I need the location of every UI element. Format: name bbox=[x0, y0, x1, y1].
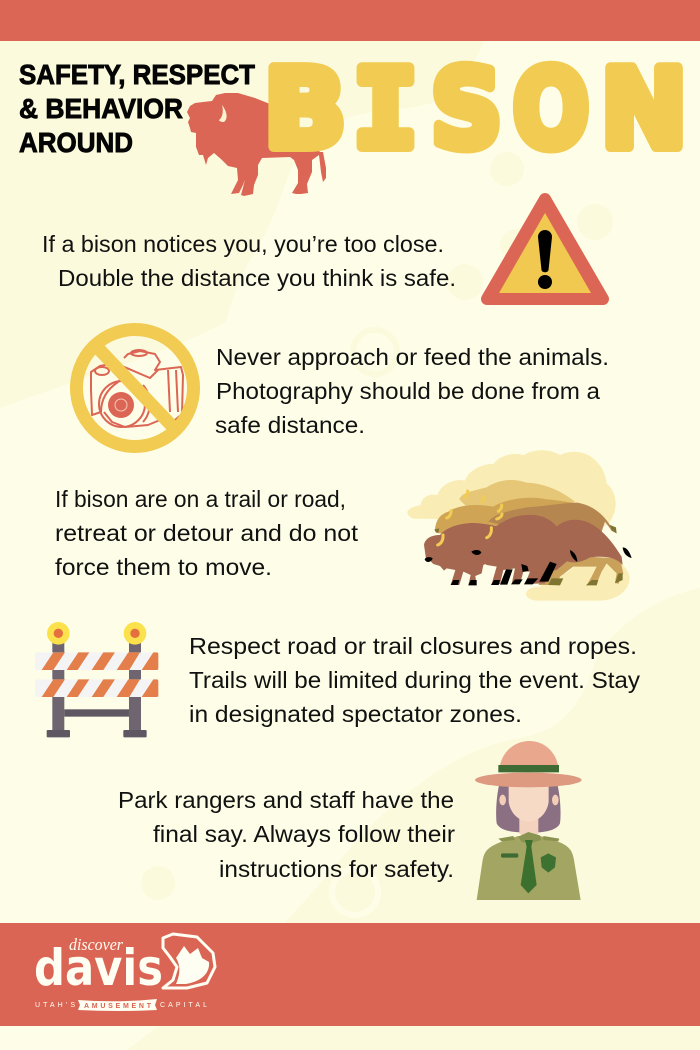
icon: stampeding bison herd bbox=[407, 450, 632, 601]
text: road closures: Trails will be limited during the event. Stay bbox=[189, 667, 640, 693]
text: never approach: safe distance. bbox=[215, 412, 365, 438]
logo: discover davis: davis bbox=[34, 939, 163, 997]
text: road closures: Respect road or trail closures and ropes. bbox=[189, 633, 637, 659]
text: too close: If a bison notices you, you’re too close. bbox=[42, 231, 444, 257]
heading: BISON: N bbox=[601, 48, 687, 172]
logo: discover davis bbox=[34, 934, 215, 1011]
text: park rangers: final say. Always follow their bbox=[153, 821, 455, 847]
text: too close: Double the distance you think is safe. bbox=[58, 265, 456, 291]
icon: bison horn bbox=[219, 105, 227, 122]
heading: BISON: O bbox=[513, 48, 589, 172]
text: bison on trail: retreat or detour and do not bbox=[55, 520, 358, 546]
logo: discover davis: AMUSEMENT bbox=[84, 1003, 152, 1010]
text: road closures: in designated spectator zones. bbox=[189, 701, 522, 727]
text: too close bbox=[42, 231, 456, 291]
text: never approach: Photography should be done from a bbox=[216, 378, 601, 404]
icon: no camera bbox=[76, 330, 194, 446]
icon: park ranger bbox=[475, 741, 582, 900]
icon: bison silhouette bbox=[187, 93, 326, 196]
heading: safety, respect and behavior around: AROUND bbox=[19, 127, 133, 158]
heading: safety, respect and behavior around: & BEHAVIOR bbox=[19, 93, 183, 124]
logo: discover davis: CAPITAL bbox=[160, 1002, 207, 1009]
heading: safety, respect and behavior around: SAFETY, RESPECT bbox=[19, 59, 255, 90]
text: bison on trail: force them to move. bbox=[55, 554, 272, 580]
text: park rangers bbox=[118, 787, 455, 882]
heading: BISON bbox=[264, 48, 687, 172]
text: bison on trail: If bison are on a trail or road, bbox=[55, 486, 346, 512]
text: never approach: Never approach or feed the animals. bbox=[216, 344, 609, 370]
footer band bbox=[0, 923, 700, 1026]
heading: BISON: B bbox=[264, 48, 346, 172]
logo: discover davis: UTAH’S bbox=[35, 1002, 75, 1009]
icon: road barrier bbox=[35, 622, 158, 737]
logo: discover davis: discover bbox=[69, 935, 123, 954]
heading: BISON: I bbox=[353, 48, 418, 172]
text: never approach bbox=[215, 344, 609, 438]
top band bbox=[0, 0, 700, 41]
heading: BISON: S bbox=[431, 48, 502, 172]
text: park rangers: Park rangers and staff have the bbox=[118, 787, 454, 813]
text: road closures bbox=[189, 633, 640, 727]
text: bison on trail bbox=[55, 486, 358, 580]
text: park rangers: instructions for safety. bbox=[219, 856, 454, 882]
heading: safety, respect and behavior around bbox=[19, 59, 255, 158]
icon: warning triangle bbox=[487, 199, 603, 299]
